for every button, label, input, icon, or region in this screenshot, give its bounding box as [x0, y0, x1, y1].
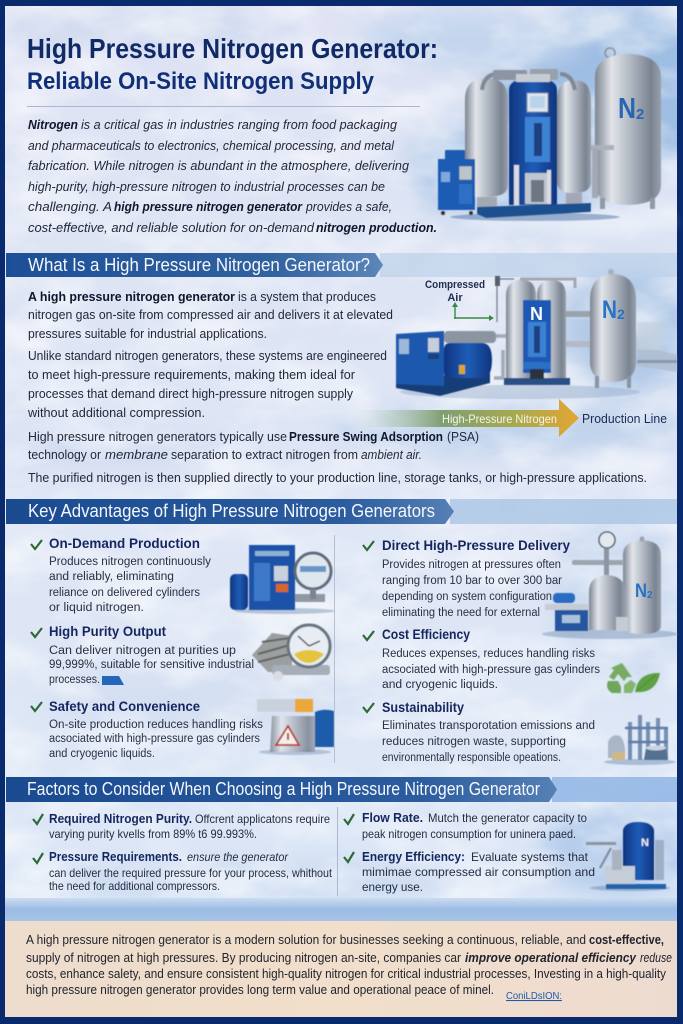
- conclusion panel: [5, 921, 677, 1017]
- what is text: technology or: [28, 447, 102, 462]
- advantage: sustainability: Eliminates transporotation emissions and: [382, 720, 595, 732]
- arrow: high-pressure nitrogen: High-Pressure Nitrogen: [442, 412, 557, 426]
- advantage: safety and convenience: and cryogenic liquids.: [49, 748, 155, 760]
- intro paragraph: [28, 117, 437, 235]
- factor: pressure requirements: can deliver the required pressure for your process, whithout: [49, 866, 333, 880]
- advantage: on-demand production: or liquid nitrogen.: [49, 602, 144, 614]
- factor: energy efficiency: Energy Efficiency:: [362, 849, 465, 864]
- factor: required nitrogen purity: varying purity kvells from 89% t6 99.993%.: [49, 827, 257, 841]
- icon: small blue badge: [102, 676, 124, 685]
- advantage: direct high-pressure delivery: eliminating the need for external: [382, 607, 540, 619]
- factor: pressure requirements: the need for additional compressors.: [49, 879, 220, 893]
- title: Reliable On-Site Nitrogen Supply: [27, 68, 375, 95]
- conclusion panel: reduse: [640, 951, 672, 965]
- advantage: direct high-pressure delivery: ranging from 10 bar to over 300 bar: [382, 575, 562, 587]
- what is text: nitrogen gas on-site from compressed air and delivers it at elevated: [28, 307, 393, 322]
- factor: flow rate: Mutch the generator capacity to: [428, 811, 587, 825]
- conclusion panel: ConiLDsION:: [506, 990, 562, 1002]
- factor: required nitrogen purity: Required Nitrogen Purity.: [49, 811, 192, 826]
- intro paragraph: high-purity, high-pressure nitrogen to industrial processes can be: [28, 179, 385, 194]
- what is text: is a system that produces: [238, 289, 376, 304]
- what is text: (PSA): [447, 429, 479, 444]
- what is text: to meet high-pressure requirements, making them ideal for: [28, 367, 356, 382]
- advantage: direct high-pressure delivery: Direct High-Pressure Delivery: [382, 538, 570, 553]
- what is text: Pressure Swing Adsorption: [289, 429, 443, 444]
- title: High Pressure Nitrogen Generator:: [27, 33, 438, 64]
- header strips: [380, 253, 677, 802]
- icon: pressure gauge with stack: [252, 625, 330, 681]
- factor: flow rate: Flow Rate.: [362, 810, 423, 825]
- icon: compact generator: [586, 822, 670, 891]
- factor: required nitrogen purity: Offcrent applicatons require: [195, 812, 330, 826]
- advantage: on-demand production: Produces nitrogen continuously: [49, 556, 211, 568]
- label: compressed air: [425, 279, 485, 304]
- factor: pressure requirements: Pressure Requirements.: [49, 849, 182, 864]
- what is text: High pressure nitrogen generators typically use: [28, 429, 287, 444]
- advantage: high purity output: [31, 624, 254, 686]
- title: [27, 33, 438, 107]
- icon: warning tank: [257, 699, 334, 755]
- intro paragraph: nitrogen production.: [316, 220, 437, 235]
- what is text: A high pressure nitrogen generator: [28, 289, 235, 304]
- label: compressed air: Air: [447, 292, 463, 304]
- factor: flow rate: peak nitrogen consumption for uninera paed.: [362, 827, 576, 841]
- advantage: safety and convenience: On-site production reduces handling risks: [49, 719, 263, 731]
- icon: high-pressure tanks: [542, 532, 678, 639]
- factor: required nitrogen purity: [33, 811, 330, 841]
- label: N2 on storage tank: N: [602, 296, 617, 324]
- label: N2 on tank: 2: [636, 106, 644, 123]
- label: N2 small tank: 2: [647, 590, 653, 601]
- factor: energy efficiency: Evaluate systems that: [471, 850, 589, 864]
- advantage: on-demand production: [31, 536, 211, 614]
- label: N2 on storage tank: 2: [617, 306, 625, 322]
- conclusion panel: high pressure nitrogen generator provides long term value and operational peace of minel.: [26, 983, 494, 997]
- label: N on generator panel: N: [530, 304, 543, 324]
- intro paragraph: is a critical gas in industries ranging from food packaging: [81, 117, 398, 132]
- label: production line: Production Line: [582, 412, 667, 426]
- what is text: separation to extract nitrogen from: [171, 447, 358, 462]
- factor: flow rate: [344, 810, 587, 841]
- banner: what is: What Is a High Pressure Nitrogen Generator?: [28, 255, 370, 275]
- icon: control cabinet and gauge: [230, 545, 335, 614]
- advantage: cost efficiency: acsociated with high-pressure gas cylinders: [382, 664, 600, 676]
- advantage: direct high-pressure delivery: [363, 538, 570, 619]
- advantage: sustainability: Sustainability: [382, 700, 464, 715]
- advantage: sustainability: reduces nitrogen waste, supporting: [382, 736, 566, 748]
- intro paragraph: provides a safe,: [305, 199, 392, 214]
- intro paragraph: fabrication. While nitrogen is abundant in the atmosphere, delivering: [28, 158, 410, 173]
- advantage: cost efficiency: Reduces expenses, reduces handling risks: [382, 648, 595, 660]
- banner: key advantages: Key Advantages of High Pressure Nitrogen Generators: [28, 501, 435, 521]
- what is text: membrane: [105, 447, 168, 462]
- advantage: cost efficiency: and cryogenic liquids.: [382, 679, 498, 691]
- what is text: [27, 289, 647, 485]
- intro paragraph: and pharmaceuticals to electronics, chemical processing, and metal: [28, 138, 395, 153]
- banner: factors: Factors to Consider When Choosing a High Pressure Nitrogen Generator: [27, 779, 540, 799]
- illustration: nitrogen generator system: [438, 48, 675, 233]
- conclusion panel: improve operational efficiency: [465, 951, 637, 965]
- advantage: on-demand production: and reliably, eliminating: [49, 571, 174, 583]
- advantage: on-demand production: On-Demand Production: [49, 536, 200, 551]
- advantage: cost efficiency: Cost Efficiency: [382, 627, 470, 642]
- advantage: on-demand production: reliance on delivered cylinders: [49, 587, 200, 599]
- what is text: Unlike standard nitrogen generators, these systems are engineered: [28, 348, 387, 363]
- advantage: safety and convenience: Safety and Convenience: [49, 699, 200, 714]
- factor: energy efficiency: energy use.: [362, 880, 423, 894]
- icon: compact generator: N: [641, 837, 649, 849]
- advantage: high purity output: High Purity Output: [49, 624, 166, 639]
- conclusion panel: supply of nitrogen at high pressures. By producing nitrogen an-site, companies car: [26, 951, 461, 965]
- conclusion panel: cost-effective,: [589, 933, 664, 947]
- advantage: safety and convenience: acsociated with high-pressure gas cylinders: [49, 733, 260, 745]
- advantage: sustainability: environmentally responsible opeations.: [382, 752, 561, 764]
- advantage: direct high-pressure delivery: Provides nitrogen at pressures often: [382, 559, 561, 571]
- factor: energy efficiency: mimimae compressed air consumption and: [362, 865, 595, 879]
- advantage: high purity output: processes.: [49, 674, 100, 686]
- conclusion panel: A high pressure nitrogen generator is a modern solution for businesses seeking a continuous, reliable, and: [26, 933, 586, 947]
- advantage: cost efficiency: [363, 627, 600, 691]
- advantage: safety and convenience: [31, 699, 263, 760]
- advantage: sustainability: [363, 700, 595, 764]
- factor: pressure requirements: [33, 849, 333, 893]
- advantage: high purity output: Can deliver nitrogen at purities up: [49, 645, 236, 657]
- label: N2 on tank: N: [618, 93, 636, 125]
- intro paragraph: challenging. A: [28, 199, 112, 214]
- what is text: The purified nitrogen is then supplied directly to your production line, storage tanks, or high-pressure applications.: [28, 470, 647, 485]
- column dividers: [334, 535, 338, 896]
- illustration: compressor and generator: [396, 269, 677, 399]
- factor: pressure requirements: ensure the generator: [187, 850, 289, 864]
- what is text: pressures suitable for industrial applications.: [28, 326, 267, 341]
- label: N2 small tank: N: [635, 581, 647, 602]
- advantage: direct high-pressure delivery: depending on system configuration: [382, 591, 552, 603]
- icon: processing plant: [604, 715, 676, 765]
- blue band above conclusion: [5, 898, 677, 923]
- icon: recycle and leaf: [607, 663, 660, 693]
- label: compressed air: Compressed: [425, 279, 485, 291]
- intro paragraph: Nitrogen: [28, 117, 78, 132]
- intro paragraph: high pressure nitrogen generator: [114, 199, 303, 214]
- intro paragraph: cost-effective, and reliable solution for on-demand: [28, 220, 315, 235]
- what is text: processes that demand direct high-pressure nitrogen supply: [28, 386, 353, 401]
- factor: energy efficiency: [344, 849, 595, 894]
- what is text: ambient air.: [361, 447, 422, 462]
- advantage: high purity output: 99,999%, suitable for sensitive industrial: [49, 659, 254, 671]
- what is text: without additional compression.: [27, 405, 205, 420]
- arrow: compressed air flow: [452, 302, 494, 321]
- arrow: high-pressure nitrogen: [350, 399, 579, 437]
